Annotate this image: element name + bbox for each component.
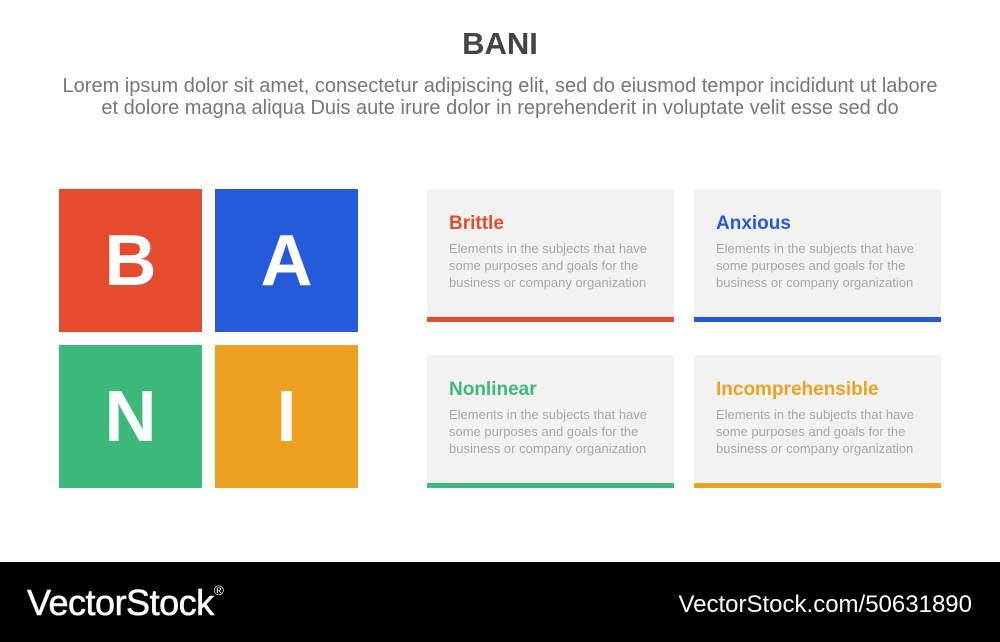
card: Anxious: Elements in the subjects that have some purposes and goals for the business or company organization [716,241,914,290]
square A: A [260,220,312,300]
card: Anxious: Anxious [716,213,791,234]
card: Anxious [694,189,941,322]
subtitle [63,75,937,119]
subtitle: et dolore magna aliqua Duis aute irure dolor in reprehenderit in voluptate velit esse sed do [101,97,899,119]
title: BANI [462,26,538,61]
card: Brittle: Brittle [449,213,504,234]
card: Brittle [427,189,674,322]
card: Nonlinear [427,355,674,488]
card: Nonlinear: Nonlinear [449,379,537,400]
footer logo: VectorStock® [27,582,223,623]
square I [215,345,358,488]
square N: N [104,376,156,456]
card: Nonlinear: Elements in the subjects that have some purposes and goals for the business or company organization [449,407,647,456]
footer bar [0,562,1000,642]
square N [59,345,202,488]
footer url: VectorStock.com/50631890 [678,591,972,618]
card: Incomprehensible: Incomprehensible [716,379,879,400]
square I: I [276,376,296,456]
card: Incomprehensible [694,355,941,488]
square B [59,189,202,332]
card: Brittle: Elements in the subjects that have some purposes and goals for the business or company organization [449,241,647,290]
subtitle: Lorem ipsum dolor sit amet, consectetur adipiscing elit, sed do eiusmod tempor incididunt ut labore [63,75,937,97]
letter grid [59,189,358,488]
square A [215,189,358,332]
square B: B [104,220,156,300]
card: Incomprehensible: Elements in the subjects that have some purposes and goals for the business or company organization [716,407,914,456]
